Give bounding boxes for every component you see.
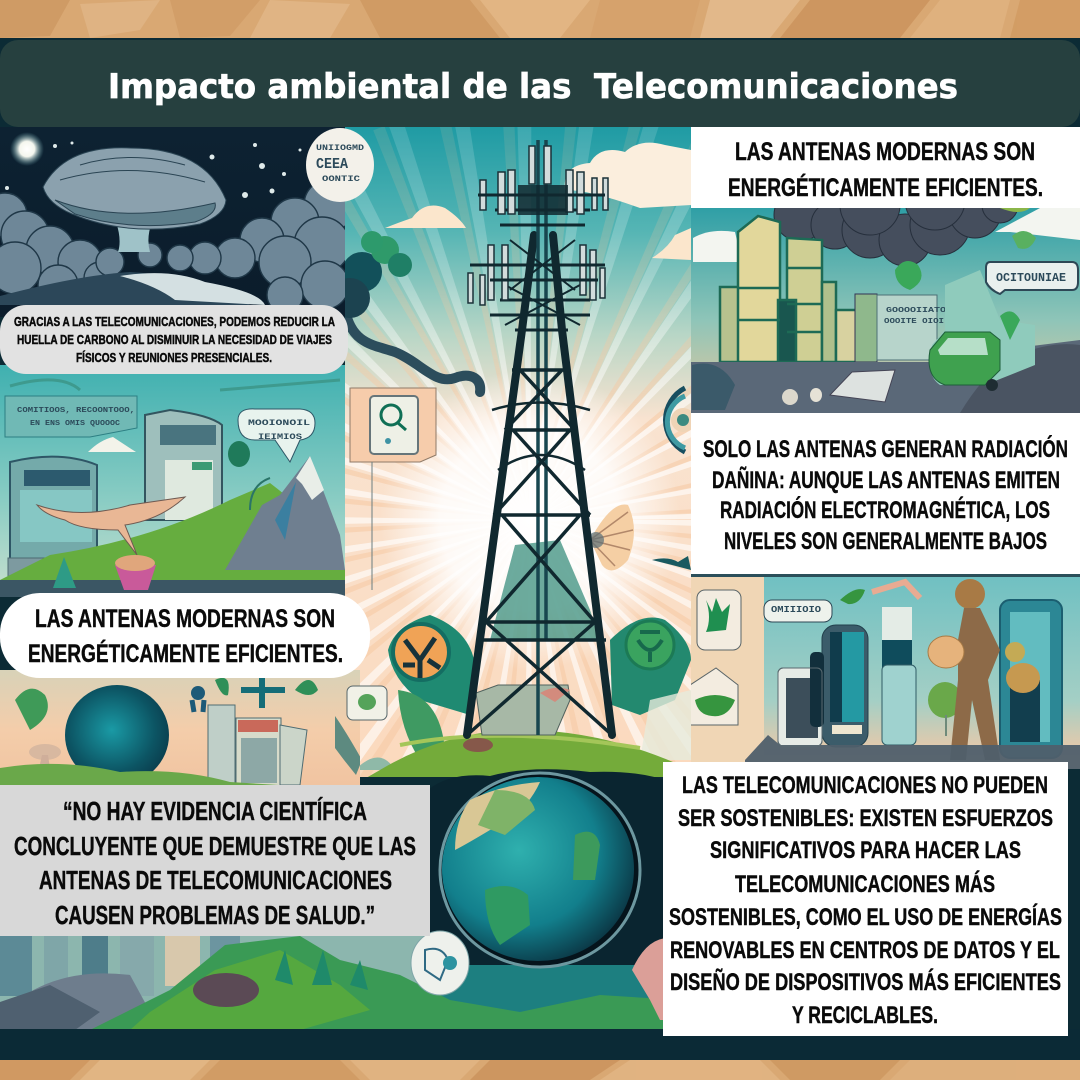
cross	[241, 675, 285, 708]
cloud left	[385, 206, 466, 228]
speech bubble: IEIMIOS	[258, 433, 302, 442]
text panel: carbon footprint pill	[0, 305, 348, 374]
dark hole behind planet	[428, 769, 670, 1000]
left bush with round badge	[388, 615, 475, 715]
cloud	[88, 437, 136, 452]
clouds white	[693, 231, 742, 262]
ground	[691, 340, 1080, 413]
title bar	[0, 40, 1080, 127]
machine right	[145, 410, 222, 520]
text panel: sustainability: Y RECICLABLES.	[792, 1002, 938, 1029]
boulder	[193, 973, 259, 1007]
text panel: efficient antennas pill	[0, 593, 370, 678]
panel: globe and hospital scene	[0, 670, 362, 790]
mushroom cloud stem	[118, 227, 150, 252]
office towers	[720, 216, 856, 362]
text panel: scientific evidence quote: CAUSEN PROBLEMAS DE SALUD.”	[55, 900, 375, 930]
creature	[37, 497, 185, 555]
antenna clusters	[468, 146, 608, 305]
floor	[745, 735, 1080, 769]
green van	[929, 270, 1035, 391]
text panel: scientific evidence quote: CONCLUYENTE QUE DEMUESTRE QUE LAS	[14, 831, 416, 861]
shells	[782, 388, 822, 405]
panel: buildings and pollution cloud	[691, 170, 1080, 413]
title: Impacto ambiental de las Telecomunicaciones	[108, 67, 958, 107]
cone	[53, 557, 76, 588]
mountain	[225, 456, 345, 570]
leaf and worm	[840, 589, 865, 604]
third device	[882, 607, 916, 745]
low building: GOOOOIIATO	[886, 307, 946, 315]
tall device	[822, 625, 868, 747]
text panel: sustainability	[663, 762, 1068, 1036]
ground	[0, 580, 345, 597]
plant sign	[690, 668, 738, 725]
speech bubble: CEEA	[316, 156, 348, 173]
equipment box	[463, 685, 570, 752]
low building	[855, 294, 946, 362]
hand sign	[697, 590, 741, 650]
smoke plume	[330, 231, 480, 392]
machine left	[8, 457, 97, 578]
tower center mast	[538, 140, 546, 735]
basket	[115, 565, 156, 590]
green hill	[0, 483, 345, 580]
low building: OOOITE OIOI	[884, 318, 944, 326]
round badge	[411, 931, 469, 995]
open book	[830, 370, 895, 402]
panel: green technology landscape	[0, 365, 345, 597]
top sign	[5, 396, 137, 437]
mushroom cloud cap	[43, 148, 226, 229]
leaf	[15, 689, 48, 730]
text panel: efficient antennas pill: ENERGÉTICAMENTE EFICIENTES.	[28, 639, 343, 668]
bright moon	[10, 132, 44, 166]
cloud banks	[0, 186, 345, 308]
grey hills	[0, 973, 160, 1030]
text panel: carbon footprint pill: GRACIAS A LAS TELECOMUNICACIONES, PODEMOS REDUCIR LA	[14, 315, 335, 329]
panel: devices scene	[690, 574, 1080, 769]
small bubble icon	[347, 686, 387, 720]
plants	[275, 950, 368, 990]
text panel: scientific evidence quote: ANTENAS DE TELECOMUNICACIONES	[39, 865, 392, 895]
speech bubble: OMIIIOIO	[771, 605, 822, 615]
cloud right	[652, 228, 691, 260]
plant	[335, 716, 362, 775]
right phone	[1000, 600, 1062, 758]
text panel: sustainability: TELECOMUNICACIONES MÁS	[735, 870, 995, 898]
speech bubble: MOOIONOIL	[248, 419, 310, 428]
leaves	[398, 690, 444, 752]
text panel: carbon footprint pill: FÍSICOS Y REUNIONES PRESENCIALES.	[76, 350, 272, 365]
background mountain behind tower	[490, 540, 600, 640]
peach sign with magnifier	[350, 388, 436, 590]
dark device behind	[810, 652, 824, 727]
antenna frame	[470, 195, 605, 315]
panel: earth and green hills	[0, 769, 680, 1030]
speech bubble: OONTIC	[322, 175, 360, 184]
dark smoke cloud	[774, 170, 1018, 266]
bird	[652, 556, 691, 570]
planet earth	[440, 773, 640, 967]
panel: night sky and clouds	[0, 127, 356, 317]
tower	[467, 140, 612, 735]
shell	[588, 504, 634, 570]
cloud top right	[565, 143, 691, 208]
furry figure	[928, 579, 1040, 760]
text panel: efficient antennas pill: LAS ANTENAS MODERNAS SON	[35, 605, 335, 633]
text panel: carbon footprint pill: HUELLA DE CARBONO AL DISMINUIR LA NECESIDAD DE VIAJES	[17, 333, 332, 347]
top sign: COMITIOOS, RECOONTOOO,	[17, 407, 135, 415]
speech bubble: UNIIOGMD	[316, 144, 364, 153]
bottom dark strip	[0, 1029, 1080, 1060]
panel: central tower illustration	[345, 127, 691, 777]
green hill	[368, 732, 673, 777]
stars	[5, 142, 302, 198]
text panel: scientific evidence quote: “NO HAY EVIDENCIA CIENTÍFICA	[63, 796, 367, 826]
text panel: scientific evidence quote	[0, 785, 430, 936]
rainbow signal arc	[665, 388, 695, 452]
small server	[778, 668, 822, 746]
pink mushroom	[632, 938, 680, 1020]
tower legs	[467, 235, 612, 735]
water below planet	[425, 965, 670, 1015]
speech bubble	[764, 600, 832, 622]
right bush with round badge	[610, 618, 691, 715]
ribbon	[191, 686, 205, 712]
green hillside	[90, 936, 680, 1030]
green plant	[928, 682, 962, 736]
top sign: EN ENS OMIS QUOOOC	[30, 420, 120, 428]
speech bubble	[306, 128, 374, 202]
leaf	[215, 678, 229, 695]
hospital buildings	[208, 705, 307, 786]
mushroom	[29, 744, 61, 782]
city skyline	[0, 936, 240, 996]
text panel: radiation	[691, 413, 1080, 574]
grass	[0, 764, 360, 790]
tree	[228, 441, 270, 510]
speech bubble: OCITOUNIAE	[996, 271, 1066, 285]
tower cross bracing	[467, 210, 612, 735]
green leaves	[895, 261, 922, 290]
speech bubble	[238, 409, 315, 462]
text panel: efficient antennas top right	[691, 127, 1080, 208]
sun rays	[345, 127, 691, 777]
dark globe	[65, 685, 169, 785]
speech bubble	[986, 262, 1078, 294]
